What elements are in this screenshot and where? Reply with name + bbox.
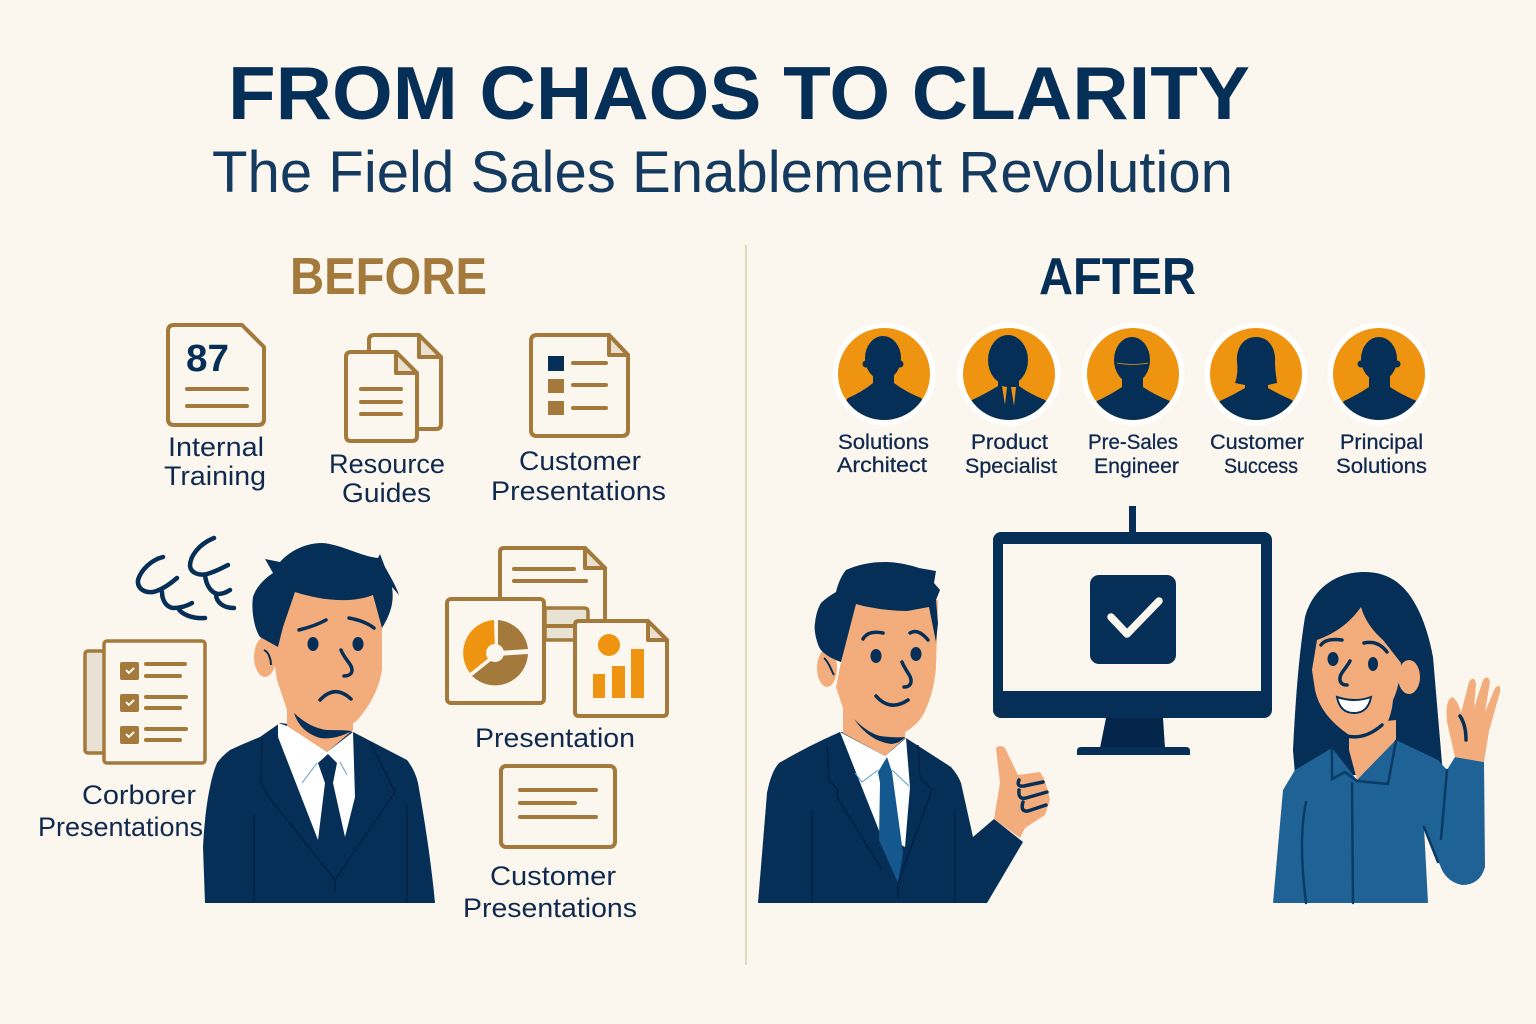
brows (299, 618, 374, 630)
suit and arm (758, 732, 1023, 903)
hair (1293, 572, 1443, 775)
character: happy salesman (758, 562, 1050, 903)
character: happy saleswoman (1273, 572, 1500, 903)
ear (254, 637, 276, 677)
label: product specialist (965, 430, 1057, 478)
mouth (320, 692, 351, 700)
avatar: solutions architect (832, 322, 936, 426)
label: corborer presentations (38, 780, 203, 842)
pie chart card (447, 599, 544, 703)
ear (1398, 660, 1420, 694)
label: customer presentations lower (463, 861, 637, 923)
icon: presentation document stack (447, 548, 667, 716)
icon: customer presentations checklist document (531, 335, 628, 436)
ear (817, 649, 837, 687)
face (271, 590, 382, 730)
brows (1321, 640, 1387, 652)
icon: monitor with checkmark (993, 506, 1272, 755)
waving hand (1447, 677, 1500, 762)
label: pre-sales engineer: Pre-Sales (1088, 430, 1178, 454)
avatar: customer success (1204, 322, 1308, 426)
label: customer success: Success (1224, 454, 1298, 478)
label: pre-sales engineer (1088, 430, 1179, 478)
neck (287, 700, 353, 752)
nose (341, 650, 352, 676)
label: resource guides (329, 449, 445, 508)
nose (902, 662, 911, 687)
chin shadow (294, 713, 352, 738)
heading: after: AFTER (1039, 248, 1196, 306)
label: customer presentations (491, 446, 666, 506)
label: product specialist: Specialist (965, 454, 1057, 478)
label: internal training: Internal (168, 432, 264, 462)
eyes (870, 649, 882, 663)
tie (878, 757, 903, 883)
label: internal training: Training (164, 461, 266, 491)
label: solutions architect: Architect (837, 453, 927, 477)
label: customer presentations: Presentations (491, 476, 666, 506)
avatar: pre-sales engineer (1082, 322, 1185, 426)
label: customer presentations lower: Customer (490, 861, 616, 891)
icon: corborer checklist document (85, 641, 205, 763)
label: corborer presentations: Presentations (38, 812, 203, 842)
nose (1340, 661, 1350, 685)
icon: stress squiggles (138, 538, 234, 618)
chin shadow (854, 719, 905, 744)
chin line (1347, 725, 1382, 737)
label: resource guides: Resource (329, 449, 445, 479)
lapels (812, 745, 955, 903)
label: customer presentations: Customer (519, 446, 641, 476)
icon: customer presentations card (501, 766, 615, 847)
label: solutions architect (837, 430, 929, 477)
label: customer presentations lower: Presentations (463, 893, 637, 923)
neck (843, 700, 905, 756)
label: product specialist: Product (971, 430, 1048, 454)
label: internal training (164, 432, 266, 491)
suit lapels (254, 738, 407, 903)
middle sheet (545, 608, 588, 640)
label: principal solutions: Principal (1340, 430, 1423, 454)
neck (1349, 720, 1396, 780)
shirt lines (1302, 741, 1447, 903)
avatar: product specialist (958, 322, 1060, 426)
bar chart card (575, 621, 667, 716)
label: principal solutions: Solutions (1336, 454, 1427, 478)
label: customer success (1210, 430, 1304, 478)
brows (863, 632, 928, 640)
label: customer success: Customer (1210, 430, 1304, 454)
eyes (308, 637, 318, 651)
heading: before: BEFORE (290, 248, 487, 306)
character: stressed salesperson (203, 543, 435, 903)
tie (318, 754, 345, 872)
icon: internal training document: 87 (186, 338, 229, 380)
suit (203, 723, 435, 903)
thumbs-up hand (994, 746, 1050, 838)
collar accents (302, 762, 347, 783)
label: principal solutions (1336, 430, 1427, 478)
shirt (278, 723, 355, 840)
label: resource guides: Guides (342, 478, 431, 508)
eyes (1328, 652, 1338, 666)
icon: resource guides documents (346, 335, 441, 441)
hair (252, 543, 399, 647)
hair (815, 562, 940, 662)
face (836, 600, 938, 737)
subtitle: The Field Sales Enablement Revolution (212, 140, 1233, 205)
icon: internal training document (168, 325, 264, 425)
label: solutions architect: Solutions (838, 430, 929, 454)
face (1312, 607, 1401, 735)
back document (500, 548, 605, 623)
shirt and arm (1273, 740, 1485, 903)
label: presentation: Presentation (475, 723, 635, 753)
smile (876, 696, 908, 705)
open smile (1337, 697, 1371, 713)
title: FROM CHAOS TO CLARITY (228, 51, 1250, 135)
avatar: principal solutions (1328, 322, 1432, 426)
center divider (745, 245, 747, 965)
label: corborer presentations: Corborer (82, 780, 196, 810)
label: pre-sales engineer: Engineer (1094, 454, 1179, 478)
shirt (840, 732, 910, 847)
collar accents (855, 770, 909, 786)
